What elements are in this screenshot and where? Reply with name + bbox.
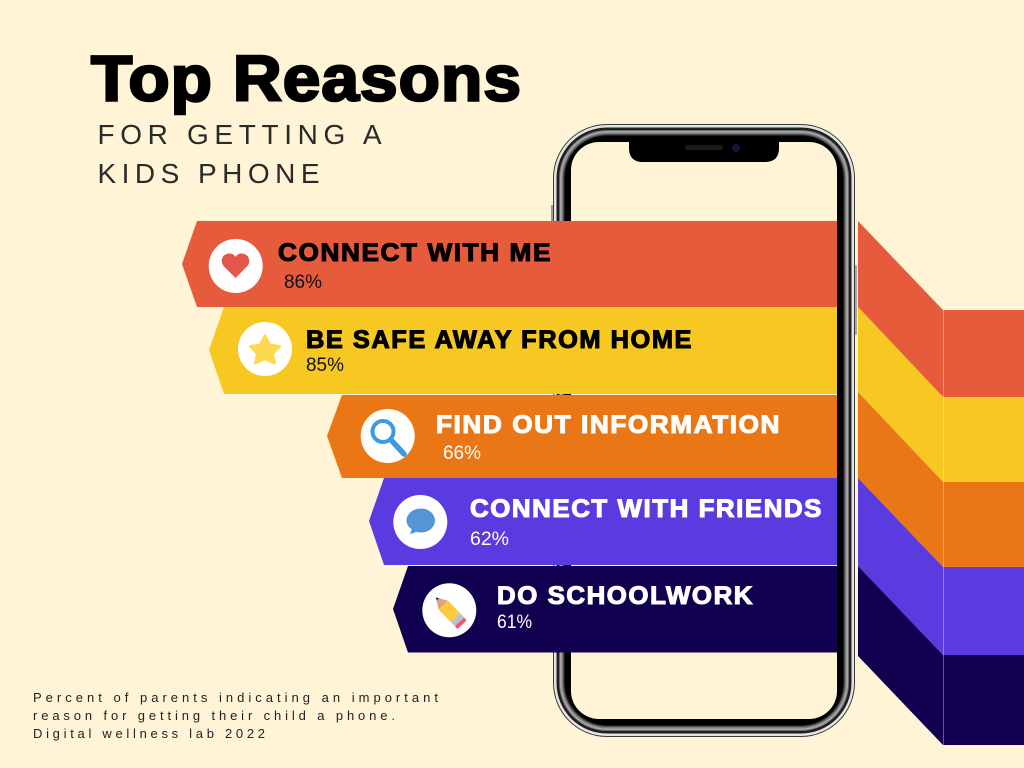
icon: heart xyxy=(209,239,263,293)
icon: magnifier xyxy=(361,409,415,463)
label: FIND OUT INFORMATION xyxy=(436,411,781,439)
bar: do schoolwork xyxy=(393,566,837,652)
footnote: Digital wellness lab 2022 xyxy=(33,726,265,741)
icon: pencil xyxy=(422,583,476,637)
title: Top Reasons xyxy=(91,42,522,114)
phone xyxy=(551,124,857,737)
value: 85% xyxy=(306,355,344,376)
value: 86% xyxy=(284,272,322,293)
label: DO SCHOOLWORK xyxy=(497,582,754,610)
subtitle xyxy=(98,119,382,189)
footnote: reason for getting their child a phone. xyxy=(33,708,395,723)
bar: be safe away from home xyxy=(209,307,837,394)
label: BE SAFE AWAY FROM HOME xyxy=(306,326,693,354)
footnote: Percent of parents indicating an important xyxy=(33,690,438,705)
subtitle: FOR GETTING A xyxy=(98,119,382,150)
3D ribbon tails xyxy=(858,221,1024,745)
icon: star xyxy=(238,322,292,376)
label: CONNECT WITH FRIENDS xyxy=(470,495,823,523)
subtitle: KIDS PHONE xyxy=(98,158,320,189)
bar: connect with friends xyxy=(369,478,837,565)
value: 66% xyxy=(443,443,481,464)
notch xyxy=(629,140,779,162)
value: 61% xyxy=(497,612,532,633)
bar: connect with me xyxy=(182,221,837,307)
value: 62% xyxy=(470,529,509,550)
bar: find out information xyxy=(327,395,837,478)
label: CONNECT WITH ME xyxy=(278,239,552,267)
footnote xyxy=(33,690,438,741)
icon: speech bubble xyxy=(393,495,447,549)
